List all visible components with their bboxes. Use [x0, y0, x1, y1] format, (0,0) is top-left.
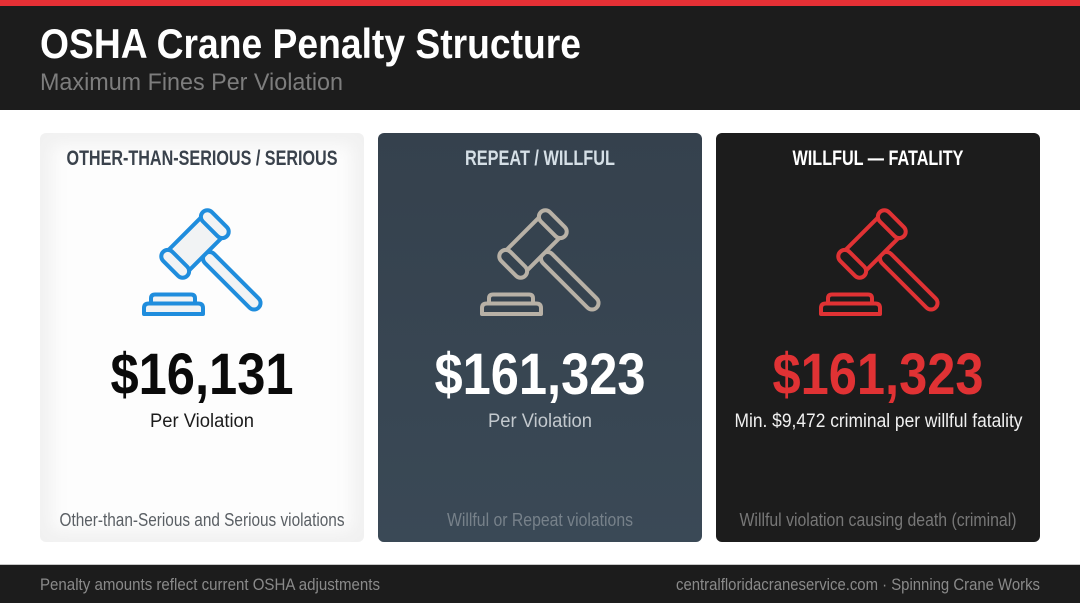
panel footnote: Willful violation causing death (criminal) — [740, 510, 1016, 530]
panel heading: OTHER-THAN-SERIOUS / SERIOUS — [66, 147, 338, 170]
panel: other-than-serious / serious — [40, 133, 364, 542]
amount caption: Min. $9,472 criminal per willful fatality — [734, 411, 1023, 432]
amount: $16,131 — [110, 342, 294, 407]
panel heading: REPEAT / WILLFUL — [465, 147, 615, 170]
panel: repeat / willful — [378, 133, 702, 542]
amount caption: Per Violation — [150, 411, 254, 432]
footer note: Penalty amounts reflect current OSHA adjustments — [40, 575, 380, 594]
panel: willful fatality — [716, 133, 1040, 542]
icon: grey gavel — [482, 208, 621, 332]
subtitle: Maximum Fines Per Violation — [40, 69, 343, 96]
amount: $161,323 — [772, 342, 984, 407]
title: OSHA Crane Penalty Structure — [40, 20, 581, 67]
panel footnote: Willful or Repeat violations — [447, 510, 633, 530]
amount caption: Per Violation — [488, 411, 592, 432]
amount: $161,323 — [434, 342, 646, 407]
footer band — [0, 564, 1080, 603]
icon: blue gavel — [144, 208, 283, 332]
panel heading: WILLFUL — FATALITY — [792, 147, 964, 170]
panel footnote: Other-than-Serious and Serious violations — [60, 510, 344, 530]
icon: red gavel — [821, 208, 960, 332]
footer source: centralfloridacraneservice.com · Spinning Crane Works — [676, 575, 1040, 594]
header band — [0, 0, 1080, 110]
